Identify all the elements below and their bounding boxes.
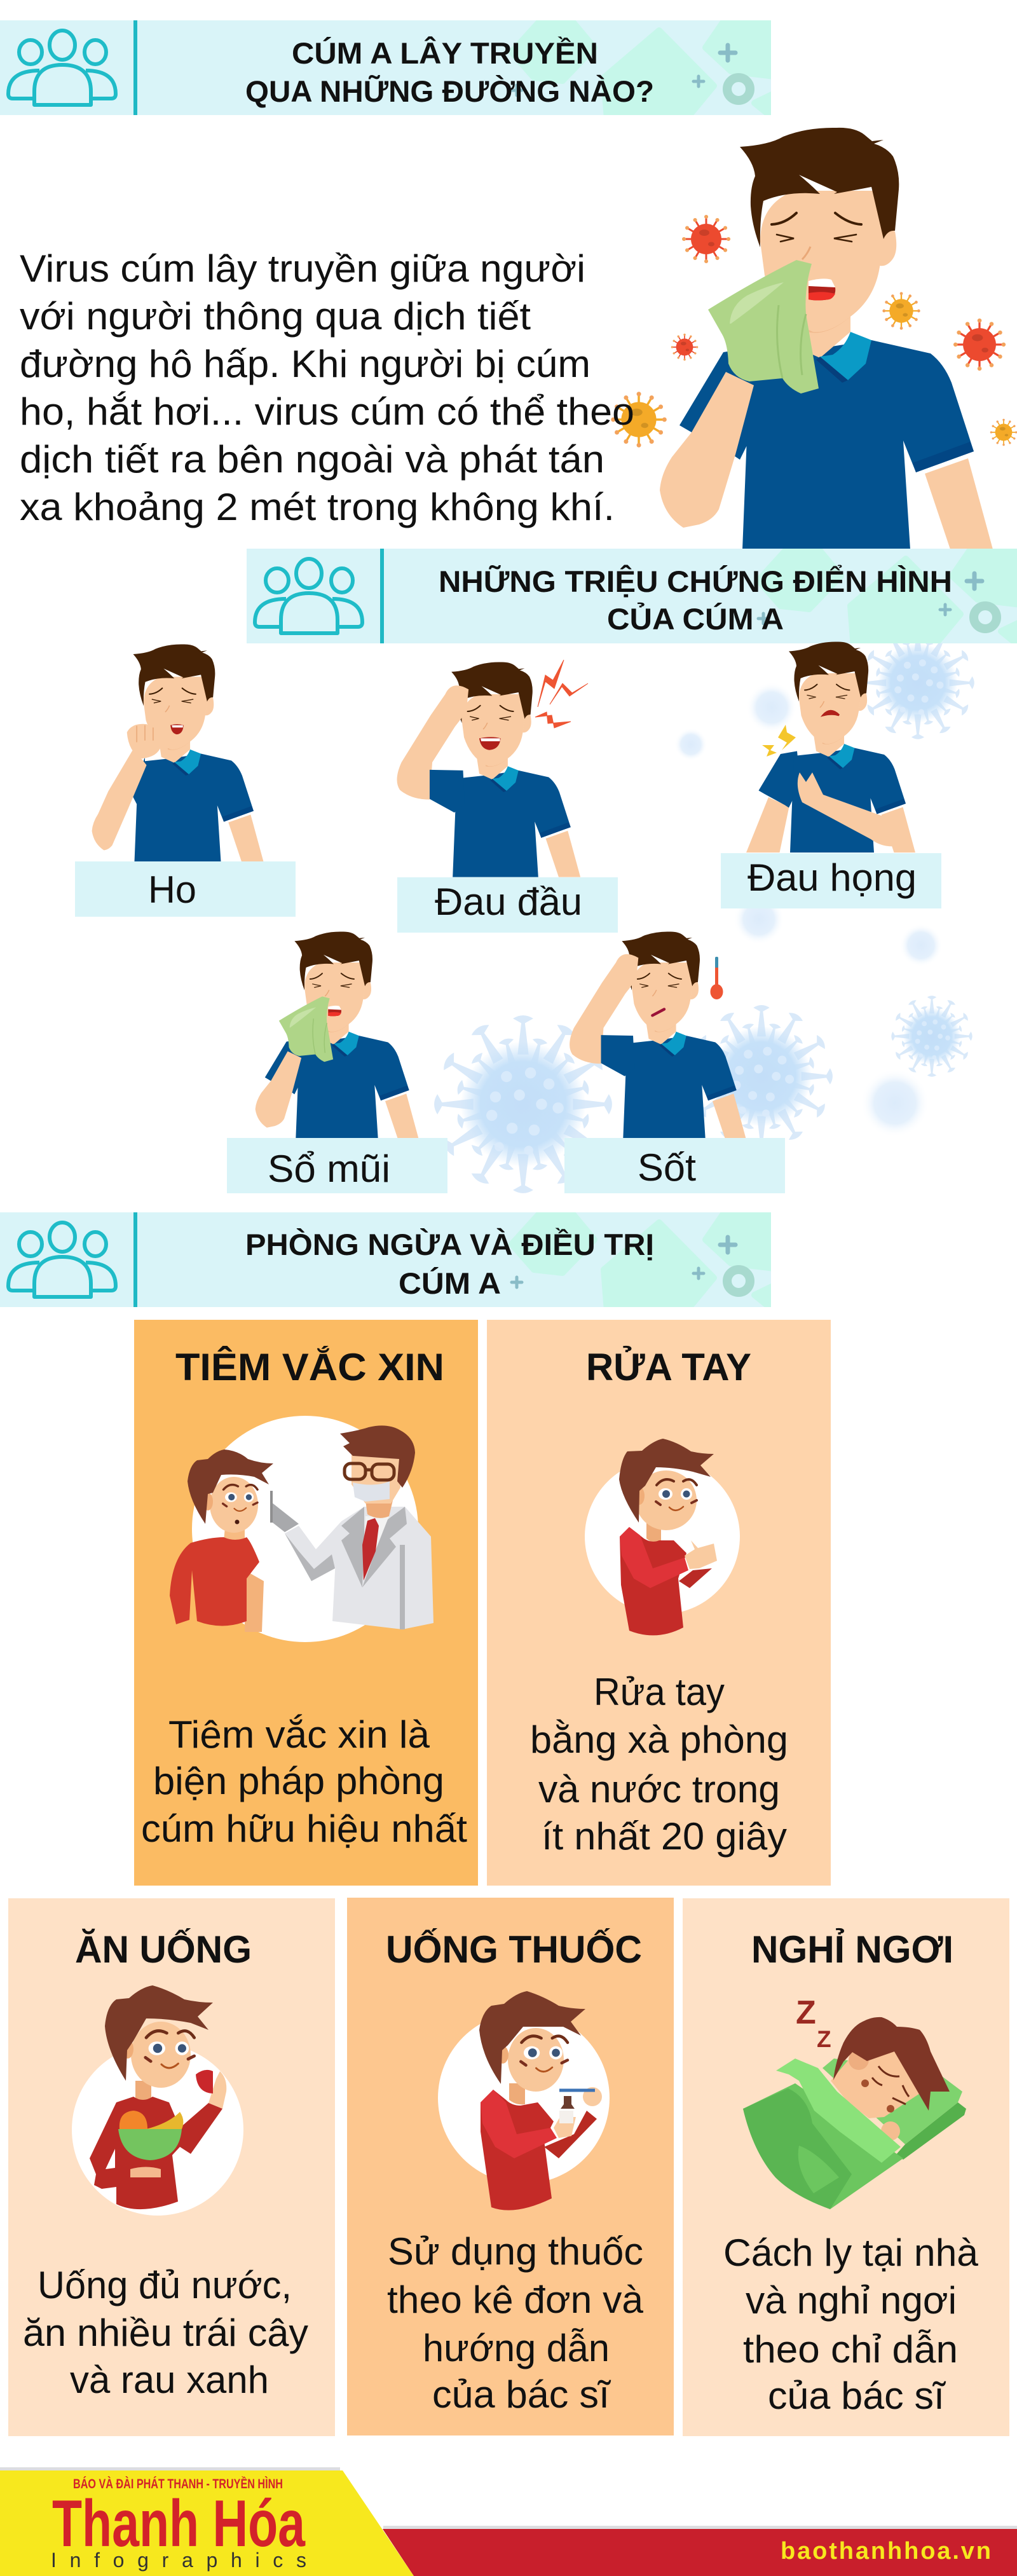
text: hand washing: và nước trong <box>538 1768 780 1811</box>
symptom: cough <box>75 644 296 917</box>
heading: hand washing: RỬA TAY <box>586 1346 751 1388</box>
illustration: sleeping kid <box>743 1994 966 2209</box>
website: baothanhhoa.vn <box>781 2538 991 2565</box>
heading: medicine: UỐNG THUỐC <box>386 1928 642 1971</box>
heading: eating: ĂN UỐNG <box>75 1928 252 1971</box>
symptom: headache <box>397 660 618 933</box>
label: Ho <box>75 861 296 917</box>
text: eating: ăn nhiều trái cây <box>23 2312 308 2354</box>
text block: transmission explanation: đường hô hấp. Khi người bị cúm <box>20 343 590 385</box>
heading: symptoms: NHỮNG TRIỆU CHỨNG ĐIỂN HÌNH <box>439 565 952 598</box>
illustration: kid eating fruit <box>72 1985 243 2216</box>
panel: vaccine card <box>134 1320 478 1886</box>
text: hand washing: Rửa tay <box>594 1671 725 1713</box>
illustration: kid washing hands <box>585 1439 740 1635</box>
label: Dau hong: Đau họng <box>747 856 917 899</box>
text block: transmission explanation: xa khoảng 2 mét trong không khí. <box>20 486 615 528</box>
panel: background pale viruses <box>434 626 974 1193</box>
illustration: sleeping kid: Z <box>796 1994 816 2031</box>
text: medicine: của bác sĩ <box>432 2373 611 2416</box>
heading: symptoms <box>439 565 952 636</box>
symptom: sore throat <box>721 641 941 908</box>
icon: red pain bolts <box>535 660 588 728</box>
text: vaccine <box>141 1713 467 1850</box>
figure: man with towel <box>660 128 993 549</box>
label: So mui <box>227 1138 447 1193</box>
panel: header symptoms <box>247 545 1017 647</box>
logo text: BÁO VÀ ĐÀI PHÁT THANH - TRUYỀN HÌNH <box>73 2477 283 2491</box>
heading: prevention: CÚM A <box>399 1266 501 1300</box>
header background and icon <box>247 545 1017 647</box>
panel: eating card <box>8 1898 335 2436</box>
label: Dau dau: Đau đầu <box>435 880 582 923</box>
heading: prevention <box>245 1228 654 1300</box>
text: vaccine: cúm hữu hiệu nhất <box>141 1807 467 1850</box>
panel: header prevention <box>0 1209 774 1311</box>
symptom: fever <box>564 931 785 1193</box>
arm across chest <box>798 772 906 846</box>
logo text: Infographics <box>51 2549 306 2572</box>
logo text: Thanh Hóa <box>52 2487 306 2561</box>
figure: man with tissue <box>256 931 418 1138</box>
illustration: doctor vaccinating kid <box>170 1416 433 1642</box>
illustration: sleeping kid: Z <box>817 2026 831 2052</box>
panel: rest card <box>683 1898 1009 2436</box>
illustration: kid taking medicine <box>438 1991 610 2210</box>
heading: vaccine: TIÊM VẮC XIN <box>175 1346 444 1388</box>
label: Sot <box>564 1138 785 1193</box>
heading: transmission: QUA NHỮNG ĐƯỜNG NÀO? <box>245 74 654 108</box>
figure: man with headache <box>397 662 580 877</box>
header background and icon <box>0 17 774 119</box>
text: rest: theo chỉ dẫn <box>743 2328 958 2371</box>
illustration: sneezing man with viruses <box>613 128 1016 549</box>
text: rest: của bác sĩ <box>768 2374 946 2417</box>
text: hand washing: ít nhất 20 giây <box>542 1815 787 1858</box>
text block: transmission explanation <box>20 247 634 528</box>
text: hand washing <box>530 1671 788 1858</box>
text block: transmission explanation: dịch tiết ra bên ngoài và phát tán <box>20 438 604 481</box>
label: Sot: Sốt <box>638 1146 696 1189</box>
panel: header transmission <box>0 17 774 119</box>
symptom: runny nose <box>227 931 447 1193</box>
text: hand washing: bằng xà phòng <box>530 1718 788 1761</box>
text: medicine: Sử dụng thuốc <box>388 2230 643 2273</box>
footer banner <box>0 2467 1017 2576</box>
icon: thermometer <box>711 957 723 999</box>
icon: red and yellow viruses <box>613 217 1016 445</box>
icon: yellow throat bolts <box>762 725 796 757</box>
label: So mui: Sổ mũi <box>268 1148 390 1190</box>
panel: medicine card <box>347 1898 674 2436</box>
heading: transmission <box>245 36 654 108</box>
label: Dau hong <box>721 853 941 908</box>
text block: transmission explanation: ho, hắt hơi... virus cúm có thể theo <box>20 390 634 433</box>
text: medicine: hướng dẫn <box>423 2327 610 2369</box>
figure: man with fever <box>570 931 746 1138</box>
text: rest <box>723 2231 979 2417</box>
heading: prevention: PHÒNG NGỪA VÀ ĐIỀU TRỊ <box>245 1228 654 1261</box>
text: eating <box>23 2264 308 2401</box>
figure: man with sore throat <box>746 641 915 853</box>
header background and icon <box>0 1209 774 1311</box>
text: medicine: theo kê đơn và <box>387 2278 644 2321</box>
text block: transmission explanation: với người thông qua dịch tiết <box>20 295 531 338</box>
text: eating: và rau xanh <box>70 2359 269 2401</box>
text: rest: và nghỉ ngơi <box>746 2279 957 2322</box>
label: Ho: Ho <box>148 868 196 911</box>
text: vaccine: Tiêm vắc xin là <box>168 1713 430 1756</box>
logo text <box>51 2477 306 2572</box>
figure: man coughing <box>92 644 263 861</box>
heading: transmission: CÚM A LÂY TRUYỀN <box>292 36 598 70</box>
text: rest: Cách ly tại nhà <box>723 2231 979 2274</box>
label: Dau dau <box>397 877 618 933</box>
text: vaccine: biện pháp phòng <box>153 1760 444 1802</box>
text block: transmission explanation: Virus cúm lây truyền giữa người <box>20 247 585 290</box>
panel: hand washing card <box>487 1320 831 1886</box>
text: medicine <box>387 2230 644 2416</box>
heading: symptoms: CỦA CÚM A <box>607 602 784 636</box>
heading: rest: NGHỈ NGƠI <box>751 1928 953 1971</box>
text: eating: Uống đủ nước, <box>38 2264 292 2306</box>
